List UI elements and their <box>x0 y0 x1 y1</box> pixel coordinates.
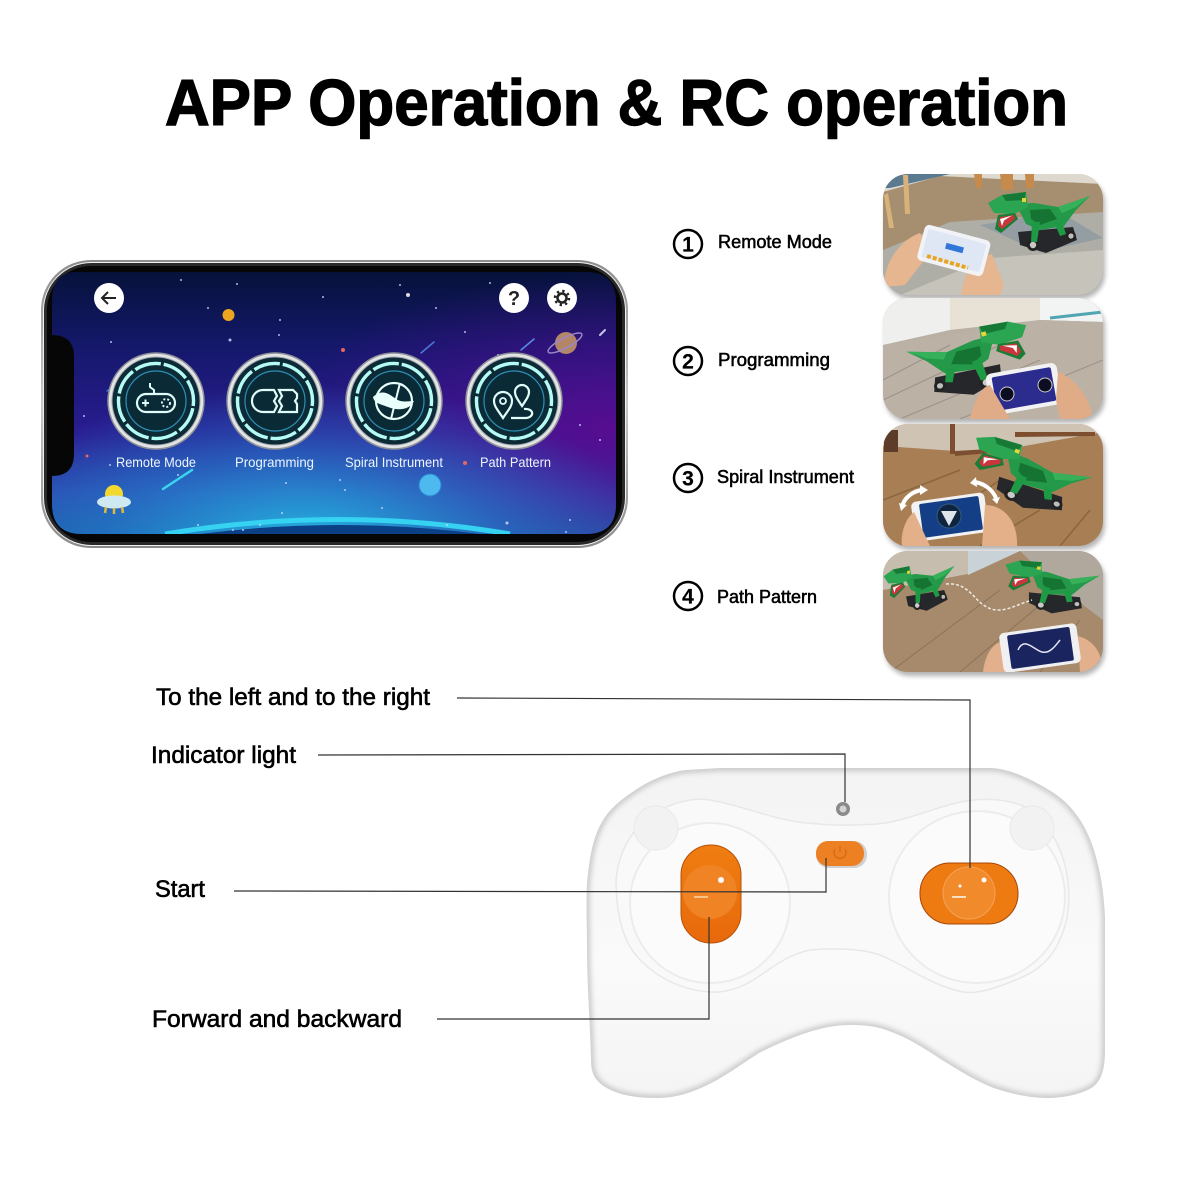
title: APP Operation & RC operation <box>165 66 1068 139</box>
photo 3: spiral instrument scene <box>883 424 1105 550</box>
right stick dial <box>889 811 1065 983</box>
callout: start <box>155 858 826 903</box>
item 1: remote mode label <box>674 230 832 258</box>
screen labels: Path Pattern <box>480 454 551 470</box>
photo 2: programming scene <box>883 298 1105 423</box>
item 4: path pattern label: Path Pattern <box>717 587 817 607</box>
screen labels: Remote Mode <box>116 454 196 470</box>
item 3: spiral instrument label: Spiral Instrument <box>717 467 854 487</box>
left stick dial <box>630 823 790 983</box>
panel: smartphone app screen <box>41 260 628 548</box>
item 4: path pattern label <box>674 582 817 610</box>
phone frame <box>41 260 628 548</box>
icon: programming <box>227 353 323 449</box>
item 1: remote mode label: Remote Mode <box>718 232 832 252</box>
left joystick <box>681 845 741 943</box>
icon: spiral instrument <box>346 353 442 449</box>
icon: orange planet <box>222 309 234 321</box>
icon: path pattern <box>466 353 562 449</box>
item 3: spiral instrument label <box>674 464 854 492</box>
power button <box>816 841 867 868</box>
screen labels <box>116 454 551 470</box>
callout: to the left and to the right <box>156 684 970 868</box>
icon: ufo <box>97 485 131 514</box>
molded top panel <box>616 799 1069 993</box>
remote controller <box>580 760 1110 1105</box>
photo 4: path pattern scene <box>883 551 1105 676</box>
screen labels: Programming <box>235 454 314 470</box>
remote body <box>580 760 1110 1105</box>
callout: start: Start <box>155 876 205 903</box>
icon: help button <box>499 283 529 313</box>
callout: forward and backward: Forward and backward <box>152 1006 402 1033</box>
app screen background <box>52 272 616 534</box>
callout: indicator light <box>151 742 845 802</box>
icon: blue planet <box>419 474 441 496</box>
left shoulder button <box>634 806 678 850</box>
indicator light <box>836 802 850 816</box>
item 1: remote mode label: 1 <box>682 234 694 256</box>
right shoulder button <box>1010 806 1054 850</box>
icon: ringed planet <box>546 330 584 356</box>
item 3: spiral instrument label: 3 <box>682 468 694 490</box>
item 4: path pattern label: 4 <box>682 586 694 608</box>
icon: back button <box>94 283 124 313</box>
item 2: programming label: 2 <box>682 350 694 374</box>
icon: remote mode <box>108 353 204 449</box>
right joystick <box>920 863 1018 924</box>
icon: settings button <box>547 283 577 313</box>
icon: help button: ? <box>508 288 520 310</box>
item 2: programming label <box>674 347 830 375</box>
photo 1: remote mode scene <box>883 174 1105 299</box>
callout: forward and backward <box>152 917 709 1033</box>
callout: to the left and to the right: To the left and to the right <box>156 684 430 711</box>
callout: indicator light: Indicator light <box>151 742 296 769</box>
screen labels: Spiral Instrument <box>345 454 443 470</box>
item 2: programming label: Programming <box>718 350 830 370</box>
